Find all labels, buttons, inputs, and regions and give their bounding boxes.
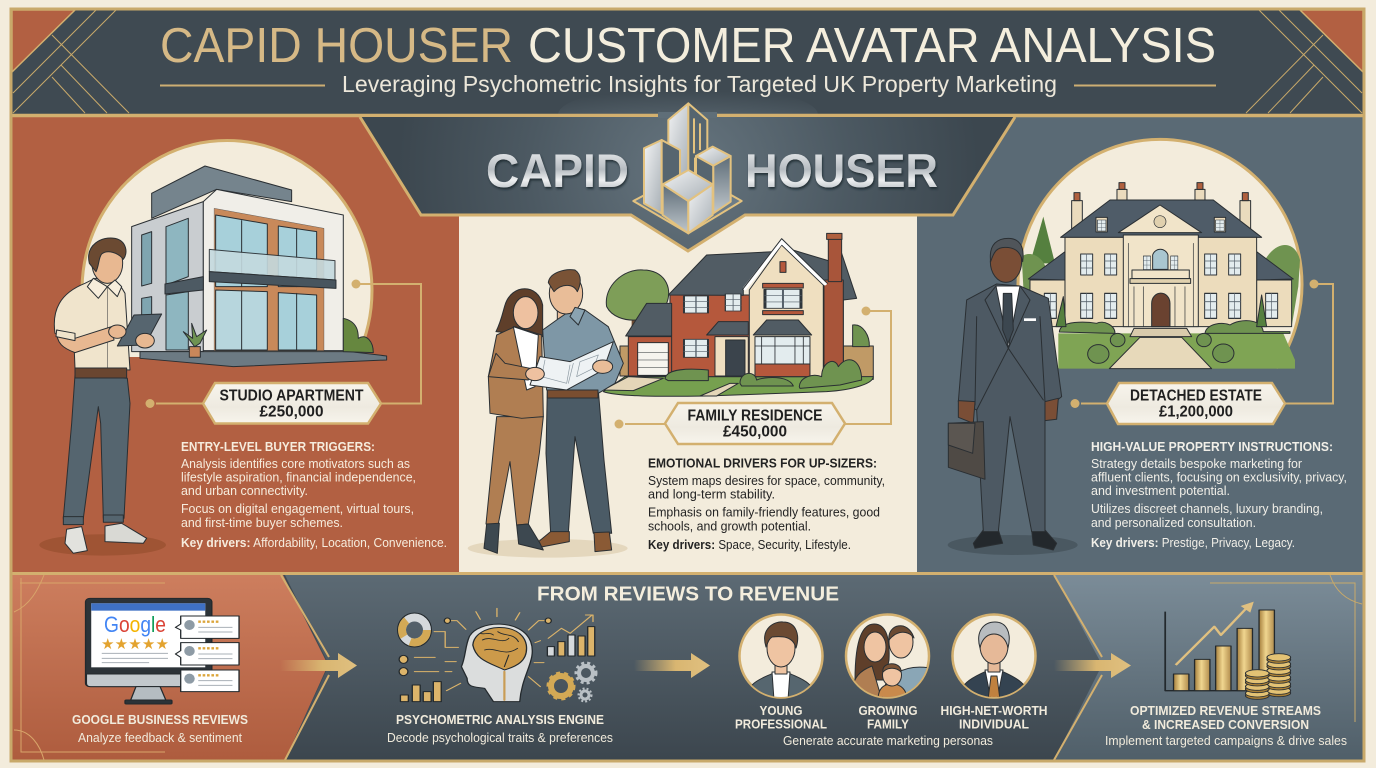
price tag: family residence (665, 403, 845, 444)
step 2: psychometric analysis engine (387, 608, 613, 745)
panel: detached estate (917, 116, 1363, 573)
illustration: businessman with briefcase (948, 238, 1078, 555)
text block: high-value property instructions: Strategy details bespoke marketing for (1091, 457, 1302, 471)
icon: monitor with reviews (86, 598, 239, 704)
connector: studio apartment (146, 280, 421, 408)
illustration backdrop circle (82, 141, 372, 357)
price tag: studio apartment: STUDIO APARTMENT (220, 388, 364, 404)
panel: entry-level studio apartment (12, 116, 460, 573)
text block: entry-level buyer triggers: Key drivers: Affordability, Location, Convenience. (181, 536, 447, 550)
text block: emotional drivers for up-sizers: and long-term stability. (648, 488, 775, 502)
price tag: detached estate: £1,200,000 (1159, 404, 1233, 420)
price tag: studio apartment (203, 383, 381, 424)
logo wordmark: HOUSER: HOUSER (745, 144, 938, 197)
persona labels: FAMILY (867, 716, 909, 732)
portrait: growing family (846, 614, 930, 700)
arrow: personas to revenue (1054, 653, 1131, 678)
strip title: FROM REVIEWS TO REVENUE (537, 584, 839, 606)
text block: entry-level buyer triggers: lifestyle aspiration, financial independence, (181, 470, 416, 484)
text block: entry-level buyer triggers: and first-time buyer schemes. (181, 516, 343, 530)
price tag: detached estate (1107, 383, 1285, 424)
icon text: google logo: Google (104, 612, 166, 637)
text block: high-value property instructions: Utilizes discreet channels, luxury branding, (1091, 502, 1323, 516)
persona labels: HIGH-NET-WORTH (940, 703, 1048, 718)
text block: emotional drivers for up-sizers: Key drivers: Space, Security, Lifestyle. (648, 538, 851, 552)
label: optimized revenue streams: & INCREASED CONVERSION (1142, 717, 1309, 732)
icon text: five gold stars: ★★★★★ (101, 636, 169, 653)
step 3: marketing personas (735, 614, 1048, 748)
illustration: brick family house (603, 233, 873, 396)
price tag: studio apartment: £250,000 (260, 404, 324, 420)
label: optimized revenue streams: OPTIMIZED REVENUE STREAMS (1130, 703, 1321, 718)
persona labels: YOUNG (760, 703, 802, 718)
icon: rising revenue chart with coins (1165, 602, 1291, 699)
text block: entry-level buyer triggers (181, 440, 447, 550)
icon: brain in head with data charts (399, 608, 595, 702)
text block: emotional drivers for up-sizers: System maps desires for space, community, (648, 474, 885, 488)
text block: emotional drivers for up-sizers: Emphasis on family-friendly features, good (648, 506, 880, 520)
step 4: optimized revenue streams (1105, 602, 1347, 748)
text block: entry-level buyer triggers: ENTRY-LEVEL BUYER TRIGGERS: (181, 440, 375, 454)
text block: high-value property instructions: affluent clients, focusing on exclusivity, privacy, (1091, 470, 1347, 484)
text block: high-value property instructions: and investment potential. (1091, 484, 1230, 498)
price tag: family residence: FAMILY RESIDENCE (688, 408, 822, 425)
logo wordmark: CAPID: CAPID (486, 144, 629, 197)
label: psychometric analysis engine: PSYCHOMETRIC ANALYSIS ENGINE (396, 712, 604, 727)
icon: gears (548, 663, 596, 702)
text block: high-value property instructions: HIGH-VALUE PROPERTY INSTRUCTIONS: (1091, 440, 1333, 454)
persona labels: PROFESSIONAL (735, 716, 827, 732)
text block: high-value property instructions: Key drivers: Prestige, Privacy, Legacy. (1091, 536, 1295, 550)
arrow: reviews to engine (280, 653, 357, 678)
text block: high-value property instructions (1091, 440, 1347, 550)
central logo badge (360, 103, 1015, 251)
text block: entry-level buyer triggers: Focus on digital engagement, virtual tours, (181, 502, 414, 516)
header banner (12, 10, 1363, 145)
text block: emotional drivers for up-sizers (648, 456, 885, 552)
connector: family residence (614, 306, 891, 428)
illustration: young professional with tablet (39, 238, 166, 556)
text block: emotional drivers for up-sizers: schools, and growth potential. (648, 520, 811, 534)
persona labels (735, 703, 1048, 732)
title: CUSTOMER AVATAR ANALYSIS (528, 19, 1216, 73)
logo icon: metallic towers (633, 103, 742, 233)
label: google business reviews: GOOGLE BUSINESS REVIEWS (72, 712, 248, 727)
caption: implement campaigns: Implement targeted campaigns & drive sales (1105, 734, 1347, 748)
portrait: young professional (740, 614, 822, 700)
caption: analyze feedback: Analyze feedback & sentiment (78, 731, 243, 745)
title (160, 19, 1216, 73)
text block: emotional drivers for up-sizers: EMOTIONAL DRIVERS FOR UP-SIZERS: (648, 456, 877, 470)
caption: decode traits: Decode psychological traits & preferences (387, 731, 613, 745)
price tag: family residence: £450,000 (723, 424, 787, 441)
text block: entry-level buyer triggers: and urban connectivity. (181, 484, 308, 498)
title: CAPID HOUSER (160, 19, 513, 73)
caption: generate personas: Generate accurate marketing personas (783, 734, 993, 748)
illustration: couple reviewing floor plan (468, 270, 628, 558)
illustration: detached mansion (1022, 183, 1300, 369)
label: optimized revenue streams (1130, 703, 1321, 732)
illustration: modern apartment building (132, 166, 387, 367)
process strip: from reviews to revenue (12, 574, 1363, 761)
persona labels: INDIVIDUAL (959, 716, 1029, 732)
portrait: high-net-worth individual (952, 614, 1036, 700)
text block: entry-level buyer triggers: Analysis identifies core motivators such as (181, 457, 410, 471)
arrow: engine to personas (634, 653, 710, 678)
panel: family residence (459, 214, 917, 573)
icon: donut chart (398, 613, 432, 647)
text block: high-value property instructions: and personalized consultation. (1091, 516, 1256, 530)
corner ornament left (12, 10, 129, 113)
connector: detached estate (1070, 280, 1333, 408)
price tag: detached estate: DETACHED ESTATE (1130, 388, 1262, 404)
persona labels: GROWING (858, 703, 918, 718)
header gold rules (12, 114, 1363, 117)
illustration backdrop circle (1018, 139, 1302, 368)
step 1: google business reviews (72, 598, 248, 745)
corner ornament right (1246, 10, 1363, 113)
subtitle: Leveraging Psychometric Insights for Targeted UK Property Marketing (342, 71, 1057, 97)
